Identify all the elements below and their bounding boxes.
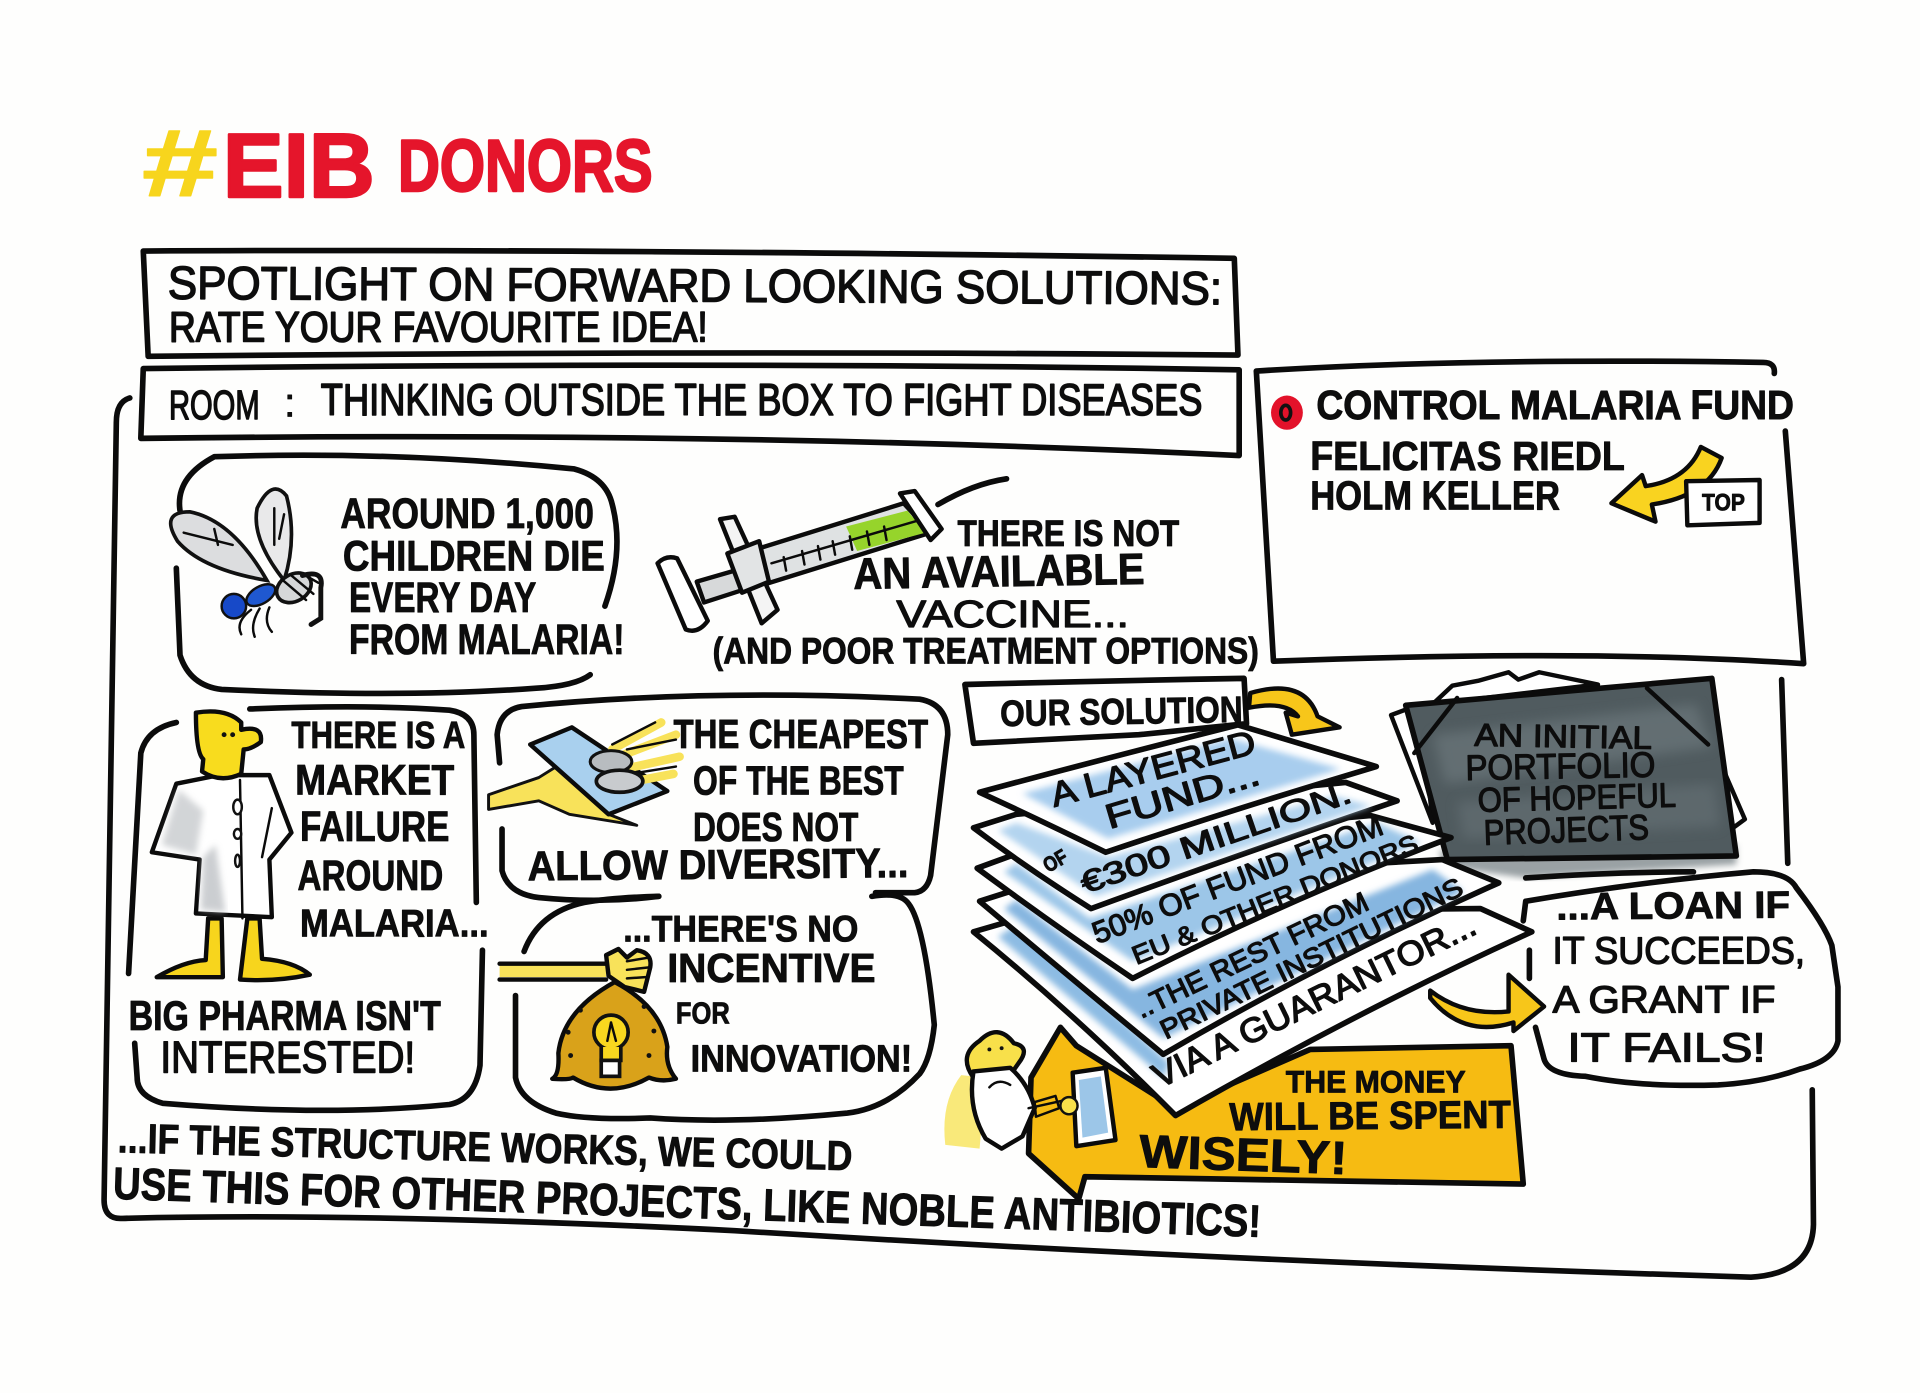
text: market failure: AROUND [298, 852, 443, 900]
heading box: room title: ROOM [169, 382, 260, 428]
sheet: rest from private institutions: ..THE REST FROM [1130, 886, 1374, 1024]
text: statistic: CHILDREN DIE [343, 533, 605, 581]
icon: hand holding money bag with bulb [500, 949, 676, 1089]
panel: cheapest of the best [489, 695, 948, 900]
sheet: rest from private institutions [980, 860, 1499, 1054]
heading box: spotlight: RATE YOUR FAVOURITE IDEA! [169, 304, 708, 352]
title [142, 111, 653, 217]
text: incentive: INNOVATION! [691, 1038, 912, 1080]
sheet: a layered fund [980, 723, 1376, 852]
fund name: CONTROL MALARIA FUND [1316, 382, 1794, 428]
text: no vaccine: VACCINE... [896, 594, 1129, 636]
icon: portfolio folder: PROJECTS [1483, 807, 1650, 853]
panel: control malaria fund [1256, 361, 1804, 664]
sheet: a layered fund: A LAYERED [1047, 723, 1260, 815]
text: market failure [291, 715, 489, 946]
title: # [142, 111, 218, 217]
icon: portfolio folder [1391, 672, 1745, 878]
text: incentive: INCENTIVE [667, 945, 876, 991]
title: EIB [223, 116, 375, 217]
text: cheapest: DOES NOT [693, 804, 859, 850]
speakers [1310, 433, 1625, 518]
icon: portfolio folder: AN INITIAL [1474, 717, 1652, 756]
text: no vaccine: AN AVAILABLE [853, 545, 1145, 599]
icon: scientist in lab coat [152, 711, 310, 980]
heading box: room title: : [284, 379, 295, 425]
text: statistic [340, 490, 624, 664]
speakers: FELICITAS RIEDL [1310, 433, 1625, 479]
callout: loan or grant: IT SUCCEEDS, [1553, 931, 1805, 973]
label: top [1686, 480, 1760, 525]
sheet: 300 million euro: €300 MILLION. [1076, 776, 1356, 901]
text: no vaccine [713, 513, 1259, 672]
panel: our solution [944, 672, 1838, 1199]
speakers: HOLM KELLER [1310, 472, 1560, 518]
callout: loan or grant: ...A LOAN IF [1556, 885, 1790, 929]
arrow: fund to loan or grant [1430, 975, 1544, 1031]
callout: loan or grant: A GRANT IF [1553, 980, 1776, 1022]
closing note [112, 1114, 1262, 1247]
arrow: money spent wisely: WISELY! [1138, 1125, 1348, 1184]
sheet: via a guarantor [973, 906, 1532, 1116]
panel: market failure [129, 707, 489, 1110]
sheet: rest from private institutions: PRIVATE INSTITUTIONS [1155, 872, 1468, 1045]
text: market failure: MARKET [295, 757, 454, 805]
icon: syringe [658, 479, 1007, 631]
text: cheapest: OF THE BEST [693, 758, 904, 804]
title: DONORS [398, 124, 653, 207]
arrow: yellow to speakers [1611, 447, 1722, 522]
icon: hand with banknote and coins [489, 722, 680, 825]
sheet: fifty percent from EU and donors: 50% OF FUND FROM [1087, 808, 1388, 951]
arrow: curved to layered fund [1249, 688, 1340, 735]
text: market failure: FAILURE [300, 803, 449, 851]
label: our solution [965, 678, 1247, 743]
icon: mosquito [171, 489, 321, 637]
text: no vaccine: THERE IS NOT [958, 513, 1180, 554]
icon: bearded man with phone [944, 1032, 1116, 1149]
text: big pharma: BIG PHARMA ISN'T [129, 992, 441, 1039]
text: statistic: FROM MALARIA! [349, 616, 624, 664]
text: statistic: EVERY DAY [349, 574, 536, 622]
text: cheapest: THE CHEAPEST [673, 711, 928, 757]
callout: loan or grant: IT FAILS! [1567, 1025, 1766, 1071]
icon: portfolio folder: PORTFOLIO [1465, 745, 1656, 788]
panel: mosquito statistic [171, 455, 624, 693]
layered fund stack [973, 723, 1532, 1116]
text: incentive: FOR [676, 997, 730, 1031]
closing note: ...IF THE STRUCTURE WORKS, WE COULD [117, 1114, 853, 1179]
icon: portfolio folder: OF HOPEFUL [1477, 777, 1676, 820]
label: our solution: OUR SOLUTION [1000, 689, 1243, 734]
heading box: spotlight [143, 251, 1238, 356]
panel: syringe no vaccine [658, 479, 1259, 672]
text: cheapest [527, 711, 928, 889]
text: big pharma: INTERESTED! [160, 1034, 415, 1083]
text: big pharma [129, 992, 441, 1083]
text: cheapest: ALLOW DIVERSITY... [527, 839, 909, 889]
text: incentive [623, 909, 912, 1080]
sheet: 300 million euro [973, 776, 1397, 909]
icon: red bullet [1271, 396, 1303, 430]
sheet: fifty percent from EU and donors [977, 808, 1451, 978]
text: incentive: ...THERE'S NO [623, 909, 858, 950]
heading box: room title: THINKING OUTSIDE THE BOX TO FIGHT DISEASES [321, 376, 1202, 425]
heading box: spotlight: SPOTLIGHT ON FORWARD LOOKING SOLUTIONS: [168, 257, 1222, 314]
sheet: fifty percent from EU and donors: EU & OTHER DONORS [1128, 830, 1422, 970]
sheet: a layered fund: FUND... [1101, 755, 1264, 837]
outer room frame [104, 398, 1813, 1277]
text: market failure: MALARIA... [300, 903, 489, 946]
text: market failure: THERE IS A [291, 715, 465, 757]
sheet: 300 million euro: OF [1039, 845, 1072, 877]
heading box: room title [141, 365, 1239, 456]
label: top: TOP [1702, 490, 1745, 517]
callout: loan or grant [1523, 872, 1838, 1085]
arrow: money spent wisely [1029, 1027, 1523, 1199]
closing note: USE THIS FOR OTHER PROJECTS, LIKE NOBLE ANTIBIOTICS! [112, 1158, 1262, 1247]
sheet: via a guarantor: VIA A GUARANTOR... [1146, 906, 1482, 1096]
text: statistic: AROUND 1,000 [340, 490, 594, 538]
text: no vaccine: (AND POOR TREATMENT OPTIONS) [713, 631, 1259, 672]
arrow: money spent wisely: THE MONEY [1286, 1063, 1466, 1099]
arrow: money spent wisely: WILL BE SPENT [1229, 1094, 1511, 1139]
panel: no incentive for innovation [500, 895, 934, 1120]
